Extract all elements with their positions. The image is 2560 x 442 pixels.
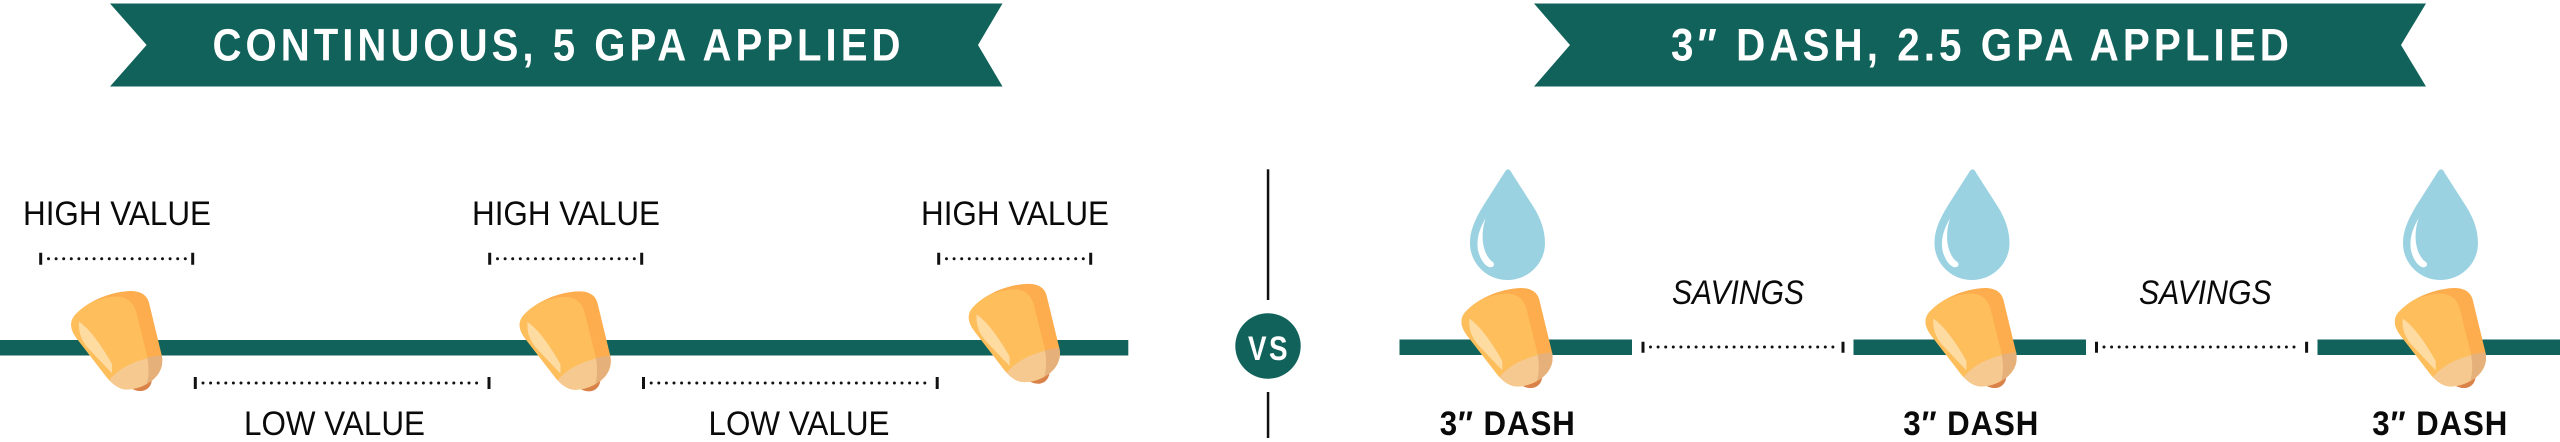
continuous band line (0, 340, 1128, 356)
icon: water drop 3 (2403, 169, 2478, 280)
vs badge (1235, 313, 1301, 379)
dash band 2 (1854, 340, 2086, 355)
bracket: high value 1 (41, 253, 193, 265)
bracket: low value 1 (195, 377, 489, 389)
divider: versus (1235, 169, 1301, 438)
vs badge: VS (1248, 330, 1290, 368)
dash band 3 (2318, 340, 2560, 355)
icon: corn seed dash 1 (1454, 280, 1560, 394)
banner: continuous, 5 GPA applied: CONTINUOUS, 5 GPA APPLIED (212, 20, 904, 71)
panel: 3 inch dash application (1400, 169, 2560, 442)
label: 3 inch dash 2: 3″ DASH (1903, 405, 2039, 442)
label: 3 inch dash 1: 3″ DASH (1440, 405, 1576, 442)
bracket: high value 2 (490, 253, 642, 265)
label: high value 2: HIGH VALUE (472, 195, 660, 233)
label: high value 1: HIGH VALUE (23, 195, 211, 233)
label: high value 3: HIGH VALUE (921, 195, 1109, 233)
bracket: low value 2 (644, 377, 937, 389)
icon: corn seed dash 3 (2387, 280, 2494, 394)
label: 3 inch dash 3: 3″ DASH (2372, 405, 2508, 442)
panel: continuous application (0, 195, 1128, 442)
bracket: savings 1 (1643, 342, 1843, 353)
icon: corn seed dash 2 (1918, 280, 2024, 394)
icon: corn seed 3 (961, 276, 1068, 389)
icon: corn seed 1 (63, 283, 170, 397)
banner: 3 inch dash, 2.5 GPA applied: 3″ DASH, 2.5 GPA APPLIED (1671, 20, 2293, 71)
bracket: high value 3 (939, 253, 1091, 265)
icon: corn seed 2 (512, 284, 618, 397)
label: low value 1: LOW VALUE (244, 405, 425, 442)
banner: 3 inch dash, 2.5 GPA applied (1534, 4, 2426, 86)
label: savings 1: SAVINGS (1672, 274, 1804, 312)
label: savings 2: SAVINGS (2139, 274, 2272, 312)
bracket: savings 2 (2096, 342, 2307, 353)
dash band 1 (1400, 340, 1632, 355)
icon: water drop 1 (1470, 169, 1545, 280)
icon: water drop 2 (1934, 169, 2009, 280)
label: low value 2: LOW VALUE (708, 405, 890, 442)
banner: continuous, 5 GPA applied (110, 4, 1002, 86)
